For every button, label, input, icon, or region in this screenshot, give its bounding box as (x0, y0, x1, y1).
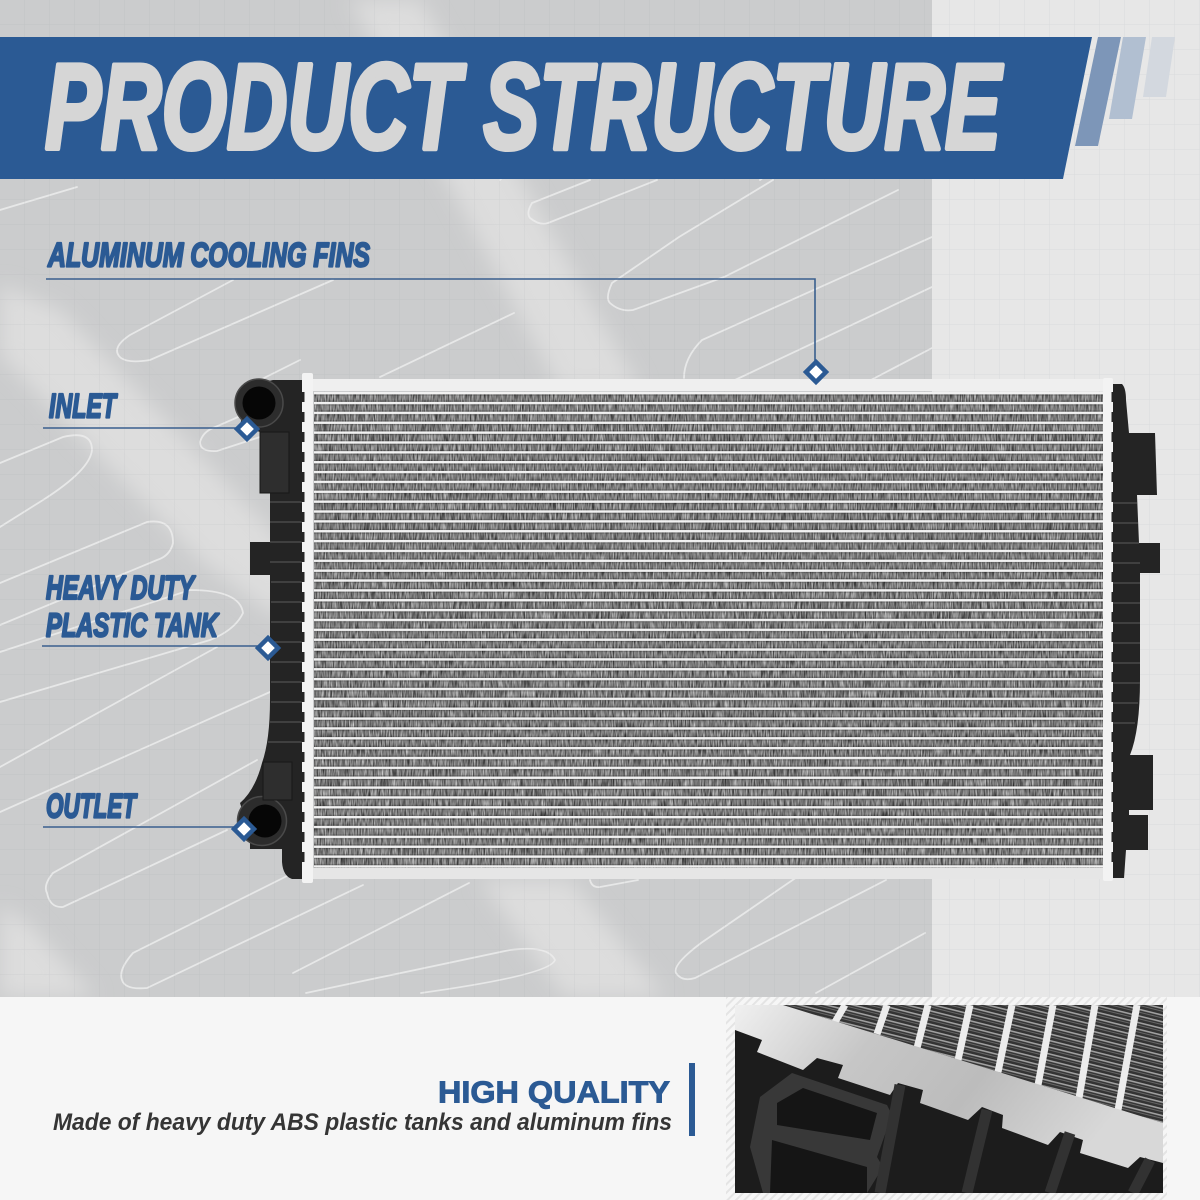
left header teeth (302, 392, 304, 870)
leader line (43, 427, 237, 429)
close-up photo inset (735, 1005, 1163, 1193)
banner shape (0, 37, 1092, 179)
right plastic tank (1113, 384, 1160, 878)
top rail (313, 379, 1103, 391)
callout: outlet (43, 788, 254, 839)
right tank ribs (1113, 503, 1140, 723)
marker (237, 419, 257, 439)
right aluminum header (1103, 378, 1113, 881)
background: left grey fin photo panel (0, 0, 932, 997)
vertical accent bar (689, 1063, 695, 1136)
leader line (42, 645, 258, 647)
callout: heavy duty plastic tank (42, 569, 278, 658)
banner stripe 3 (1143, 37, 1175, 97)
label line 1: HEAVY DUTY (46, 569, 196, 606)
heading: HIGH QUALITY (438, 1076, 670, 1110)
label: OUTLET (46, 788, 138, 826)
tank ribs (268, 502, 302, 742)
marker (806, 362, 826, 382)
bottom white panel (0, 997, 1200, 1200)
bottom rail (313, 868, 1103, 879)
left aluminum header (302, 373, 313, 883)
close-up fins (783, 1005, 1163, 1123)
banner stripe 1 (1075, 37, 1121, 146)
tank brackets (260, 432, 292, 800)
leader line (43, 826, 234, 828)
cooling fin core (314, 392, 1103, 868)
close-up bracket (750, 1073, 892, 1193)
hatched photo frame (726, 997, 1167, 1200)
leader line (46, 279, 815, 362)
high quality text block (53, 1063, 695, 1136)
close-up white tubes (835, 1005, 1137, 1110)
marker (234, 819, 254, 839)
photo dark tank base (735, 1005, 1163, 1193)
callout: inlet (43, 388, 257, 439)
label line 2: PLASTIC TANK (46, 606, 220, 644)
banner stripe 2 (1109, 37, 1146, 119)
outlet port (238, 796, 286, 846)
label: ALUMINUM COOLING FINS (47, 236, 370, 274)
right header teeth (1112, 392, 1114, 870)
close-up ribs (880, 1085, 1150, 1193)
radiator product (235, 373, 1160, 883)
title banner (0, 37, 1175, 179)
description: Made of heavy duty ABS plastic tanks and aluminum fins (53, 1109, 672, 1136)
callout: aluminum cooling fins (46, 236, 826, 382)
inlet port (235, 379, 283, 427)
left plastic tank (235, 379, 304, 879)
close-up header bar (735, 1005, 1163, 1168)
marker (258, 638, 278, 658)
label: INLET (49, 388, 118, 426)
